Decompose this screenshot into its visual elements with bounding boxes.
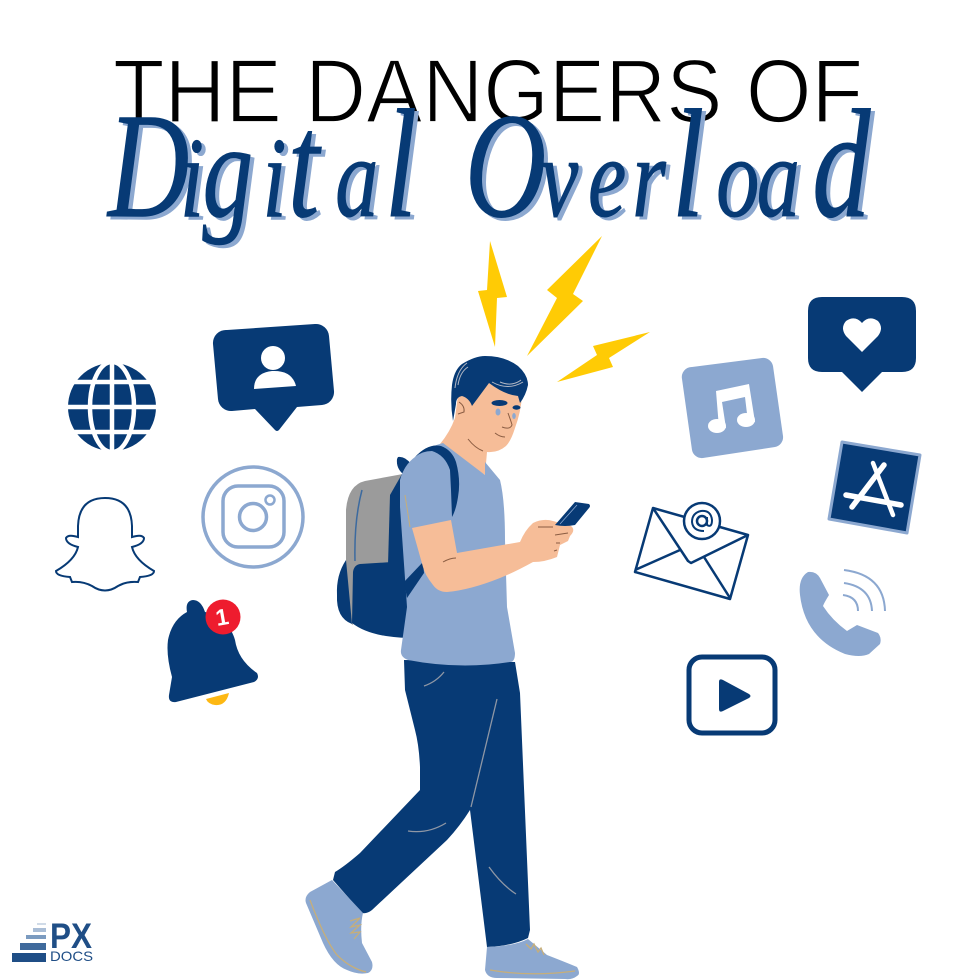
icon: music note tile (682, 358, 783, 458)
icon: profile speech bubble (213, 324, 334, 431)
icon: phone call (800, 570, 885, 656)
title: Digital Overload: ver (544, 116, 670, 244)
icon: notification bell (168, 600, 258, 705)
icon: snapchat ghost (56, 498, 154, 590)
title: Digital Overload: O (469, 85, 550, 252)
title: The Dangers of: THE DANGERS OF (113, 42, 863, 142)
t-shirt (400, 443, 515, 666)
title: Digital Overload: a (339, 116, 382, 244)
facial lines (458, 402, 512, 451)
title: Digital Overload: l (676, 81, 708, 253)
pants (333, 660, 530, 947)
title: Digital Overload: D (110, 85, 193, 252)
left shoe (306, 880, 372, 974)
hair (451, 356, 528, 421)
icon: lightning bolts (478, 236, 650, 382)
title: Digital Overload: i (184, 116, 208, 244)
backpack strap over shirt (404, 445, 459, 598)
icon: instagram (203, 467, 303, 567)
title: Digital Overload: oa (720, 116, 804, 244)
title: Digital Overload: g (203, 96, 253, 245)
title: Digital Overload: i (180, 113, 204, 241)
figure: man with phone (306, 356, 590, 979)
title: Digital Overload: D (106, 82, 189, 249)
right shoe (485, 939, 579, 979)
icon: heart speech bubble (808, 297, 916, 392)
neck and head (440, 356, 528, 475)
backpack (337, 457, 425, 638)
phone in hand (555, 502, 590, 526)
icon: globe (66, 360, 158, 454)
title: Digital Overload: t (292, 85, 326, 252)
title: Digital Overload: i (267, 116, 290, 244)
title: Digital Overload: g (207, 99, 257, 248)
eyebrows and eyes (492, 400, 508, 406)
icon: notification bell: 1 (213, 603, 231, 631)
title: Digital Overload (106, 78, 875, 253)
title: Digital Overload: t (288, 82, 322, 249)
title: Digital Overload: l (385, 78, 446, 250)
title: Digital Overload: d (816, 81, 875, 253)
title: Digital Overload: ver (540, 113, 666, 241)
logo: PX Docs: DOCS (50, 948, 93, 964)
title: Digital Overload: oa (716, 113, 800, 241)
title: Digital Overload: l (672, 78, 704, 250)
title: Digital Overload: l (389, 81, 450, 253)
logo: PX Docs (12, 917, 93, 964)
title: Digital Overload: O (465, 82, 546, 249)
logo: PX Docs: PX (50, 917, 93, 956)
title: Digital Overload: a (335, 113, 378, 241)
icon: app store tile (829, 442, 920, 533)
title: Digital Overload: i (263, 113, 286, 241)
title: Digital Overload: d (812, 78, 871, 250)
icon: email envelope (635, 503, 748, 599)
icon: video play button (689, 657, 775, 733)
pants creases (408, 672, 516, 894)
arm and hand (405, 495, 573, 592)
